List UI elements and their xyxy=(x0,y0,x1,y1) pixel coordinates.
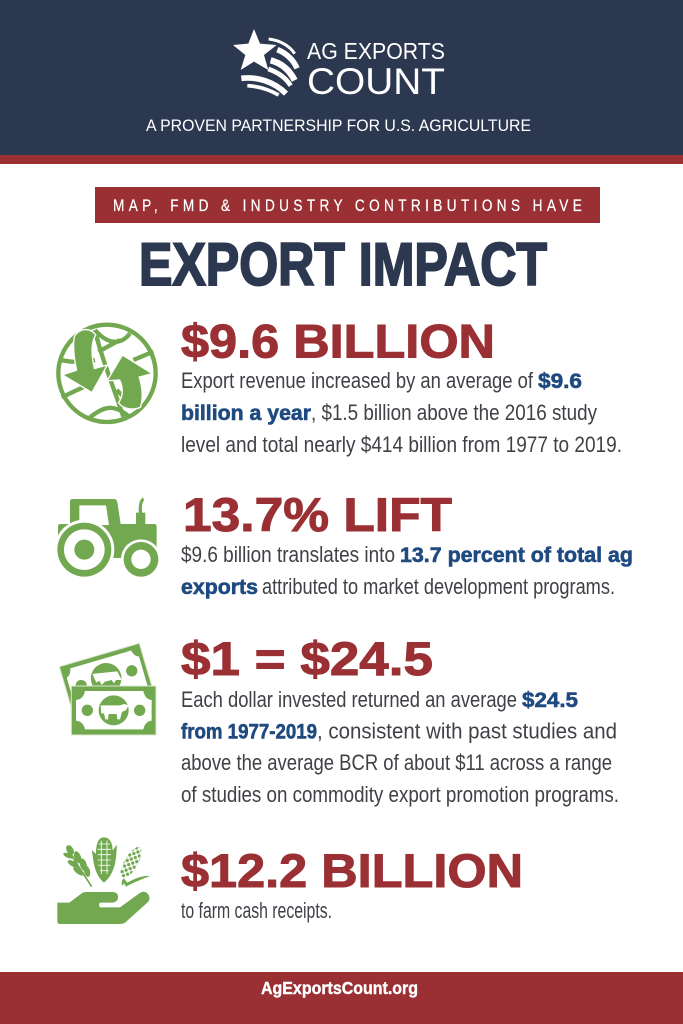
logo xyxy=(233,29,445,102)
text: export revenue description: Export revenue increased by an average of xyxy=(181,368,534,393)
hand xyxy=(57,892,150,924)
heading: $1 = $24.5: $1 = $24.5 xyxy=(181,632,433,685)
text: lift description: exports xyxy=(181,575,258,599)
text: return description: above the average BCR of about $11 across a range xyxy=(181,750,612,775)
heading: 13.7% lift: 13.7% LIFT xyxy=(183,488,452,541)
header band xyxy=(0,0,683,164)
corn xyxy=(92,837,117,883)
title: EXPORT IMPACT xyxy=(139,230,547,298)
text: export revenue description: , $1.5 billion above the 2016 study xyxy=(311,400,597,425)
text: export revenue description: $9.6 xyxy=(538,369,582,393)
text: return description: Each dollar invested returned an average xyxy=(181,687,517,712)
text: export revenue description: level and total nearly $414 billion from 1977 to 2019. xyxy=(181,432,622,457)
text: export revenue description: billion a year xyxy=(181,401,312,425)
icon: star and stripes globe xyxy=(233,29,297,95)
sorghum xyxy=(119,846,150,887)
tagline: A PROVEN PARTNERSHIP FOR U.S. AGRICULTURE xyxy=(146,116,531,135)
text: export revenue description xyxy=(181,368,622,457)
wheat xyxy=(63,844,92,887)
text: lift description: attributed to market development programs. xyxy=(262,574,615,599)
icon: globe with arrows xyxy=(58,325,156,422)
heading: $12.2 billion: $12.2 BILLION xyxy=(181,844,523,897)
text: farm receipts description: to farm cash receipts. xyxy=(181,898,332,923)
icon: hand holding crops xyxy=(57,837,150,924)
panel: export revenue xyxy=(58,314,622,457)
heading: $9.6 billion: $9.6 BILLION xyxy=(181,314,495,368)
banner: subtitle: MAP, FMD & INDUSTRY CONTRIBUTIONS HAVE xyxy=(113,197,582,215)
text: lift description: $9.6 billion translates into xyxy=(181,542,395,567)
panel: return on investment xyxy=(59,632,619,807)
text: return description: of studies on commodity export promotion programs. xyxy=(181,782,619,807)
logo text: AG EXPORTS: AG EXPORTS xyxy=(307,38,445,64)
icon: banknotes with livestock xyxy=(59,643,156,735)
icon: tractor xyxy=(54,497,161,580)
text: return description xyxy=(181,687,619,807)
text: return description: , consistent with past studies and xyxy=(317,718,617,744)
footer: AgExportsCount.org xyxy=(261,978,418,998)
text: return description: from 1977-2019 xyxy=(181,720,317,744)
text: lift description xyxy=(181,542,633,599)
text: lift description: 13.7 percent of total ag xyxy=(400,543,633,567)
footer xyxy=(0,972,683,1024)
logo text: COUNT: COUNT xyxy=(307,61,445,102)
panel: farm cash receipts xyxy=(57,837,523,924)
panel: 13.7% lift xyxy=(54,488,633,599)
text: return description: $24.5 xyxy=(522,688,578,712)
banner: subtitle xyxy=(95,187,600,223)
